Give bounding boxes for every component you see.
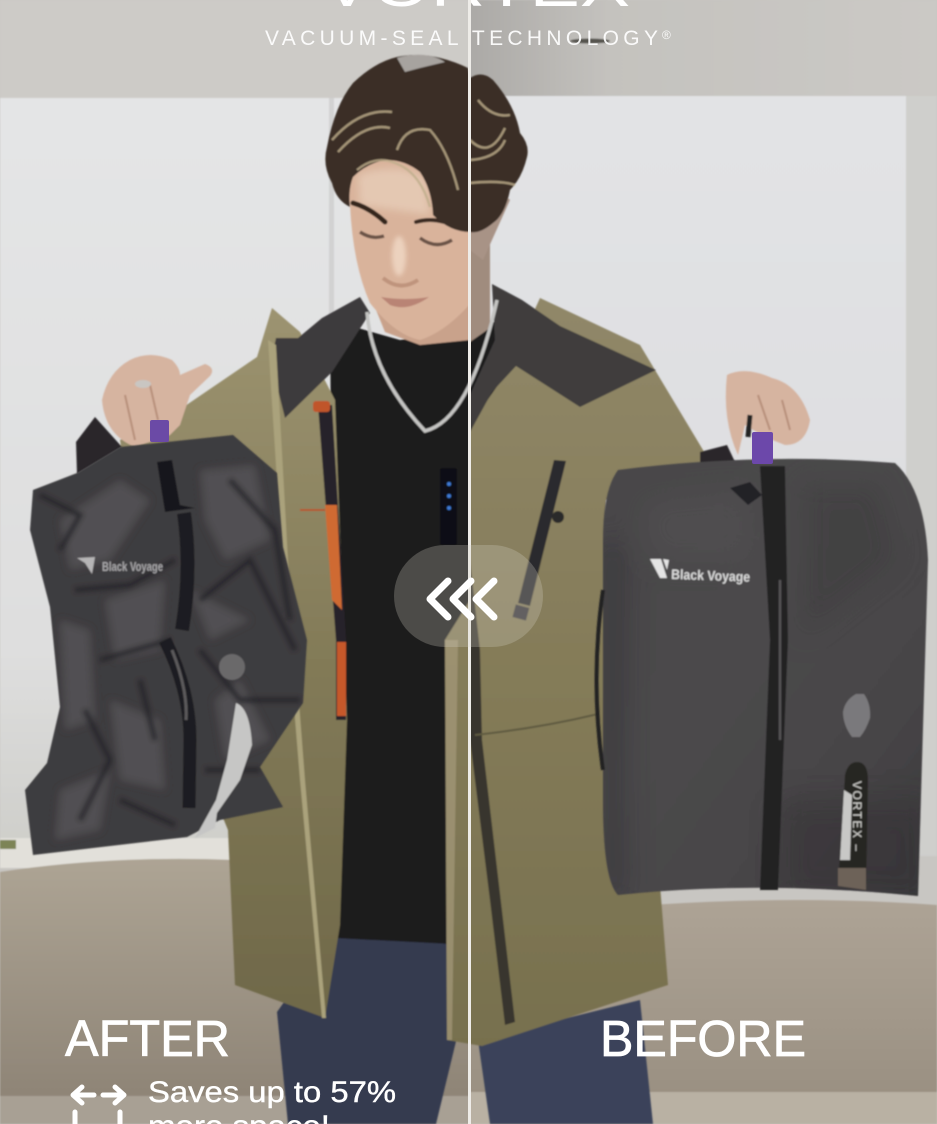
subtitle: VACUUM-SEAL TECHNOLOGY — [265, 27, 658, 50]
valve — [843, 694, 870, 737]
slider handle — [394, 545, 543, 647]
left hand — [102, 355, 212, 447]
eyes and brows — [353, 203, 385, 222]
hair — [325, 55, 528, 232]
black t-shirt — [330, 320, 500, 945]
left bag: after, compressed — [25, 435, 307, 855]
jacket zip strap with orange details — [300, 401, 346, 720]
jeans — [277, 930, 653, 1124]
divider line — [468, 0, 471, 1124]
ear — [470, 190, 510, 260]
savings text — [148, 1076, 396, 1124]
savings text: Saves up to 57% — [148, 1076, 396, 1109]
necklace — [367, 300, 497, 431]
jacket: viewer right side — [445, 298, 712, 1046]
valve — [219, 654, 245, 680]
brand label: Black Voyage — [102, 559, 163, 574]
purple tab: right bag — [752, 432, 773, 464]
chevrons — [430, 581, 494, 617]
jacket pocket zipper — [475, 460, 598, 735]
bag zipper — [157, 460, 195, 808]
label: after: AFTER — [65, 1010, 230, 1067]
brand label — [77, 557, 163, 574]
brand label: Black Voyage — [671, 566, 751, 585]
label: before: BEFORE — [600, 1010, 806, 1067]
chest device with blue lights — [440, 468, 457, 545]
jacket front placket — [470, 560, 515, 1025]
brand label — [650, 559, 751, 585]
right bag: before, full — [596, 459, 930, 900]
subtitle: ® — [662, 28, 671, 42]
head — [345, 150, 510, 340]
window slot with vortex label: VORTEX – — [850, 781, 864, 851]
silver patch — [195, 703, 252, 838]
neck — [372, 225, 490, 345]
bag wrinkles — [40, 465, 300, 840]
bag shading — [600, 480, 930, 900]
nose shadow — [383, 278, 418, 286]
person — [76, 55, 810, 1124]
side straps — [596, 590, 603, 770]
bag zipper — [760, 466, 788, 890]
right hand — [726, 371, 810, 455]
purple tab: left bag — [150, 420, 169, 442]
handle knot — [730, 482, 762, 505]
right sleeve cuff — [700, 445, 735, 465]
jacket hood: right — [470, 284, 656, 432]
mouth — [381, 297, 429, 307]
left sleeve cuff — [76, 417, 122, 474]
jacket hood: left — [271, 297, 370, 418]
icon: space saved arrows — [73, 1087, 124, 1124]
window slot with vortex label — [838, 762, 868, 890]
jacket: viewer left side — [120, 308, 347, 1018]
